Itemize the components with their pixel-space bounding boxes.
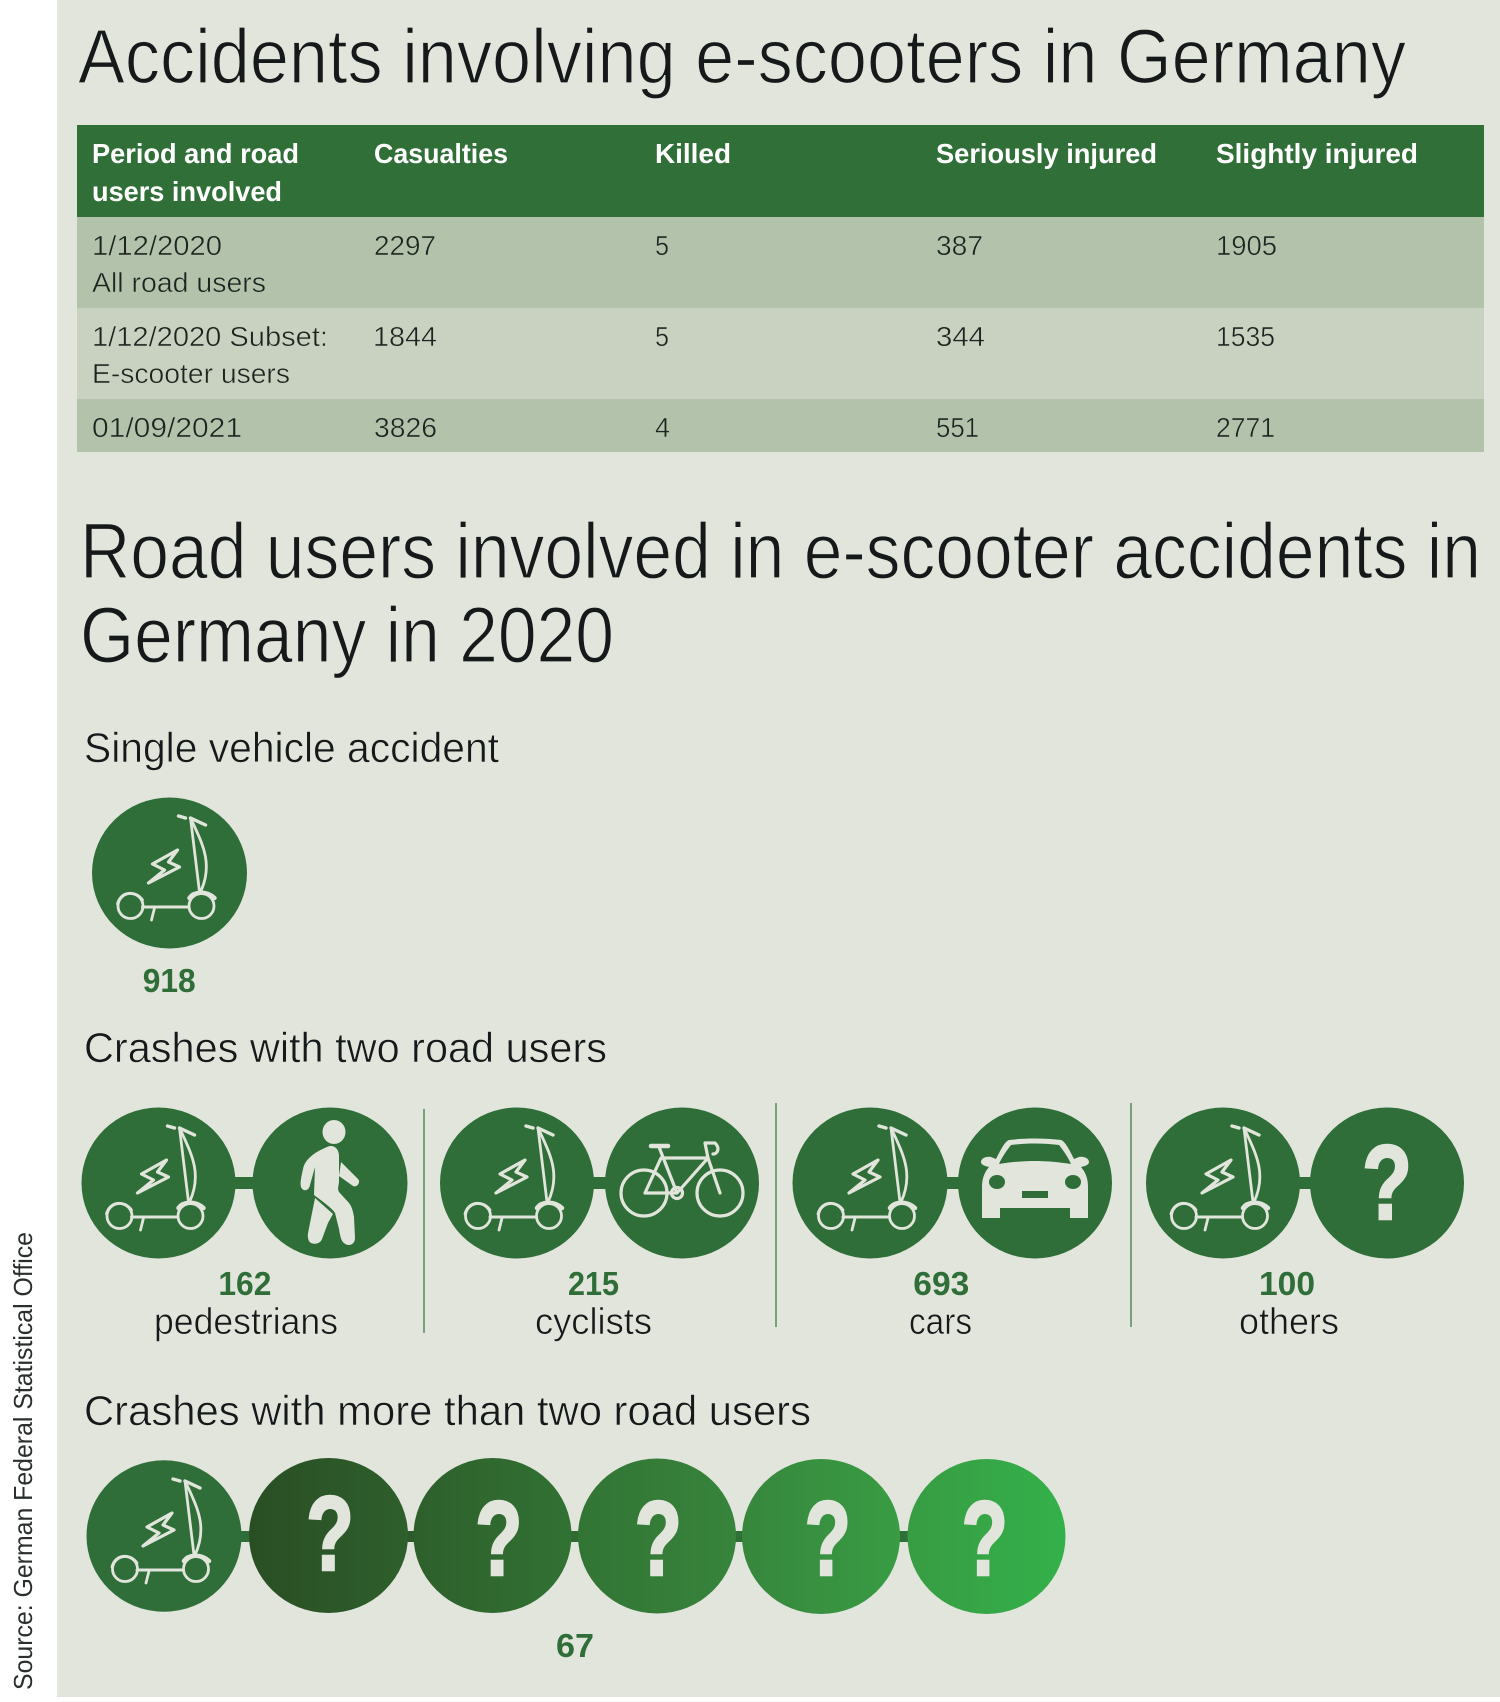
icon: scooter circle: [82, 1108, 236, 1258]
icon: question circle 1: ?: [306, 1475, 354, 1593]
icon: question circle 3: ?: [634, 1480, 682, 1598]
icon: question circle 4: [742, 1459, 900, 1614]
icon: bicycle: [605, 1108, 759, 1258]
table row: e-scooter users: 1844: [373, 321, 437, 352]
icon: question circle 1: [249, 1458, 408, 1613]
icon: pedestrian: [252, 1108, 408, 1258]
table row: all road users: All road users: [92, 267, 266, 298]
table row: e-scooter users: 1/12/2020 Subset:: [92, 321, 328, 352]
subheading: crashes with more than two road users: Crashes with more than two road users: [84, 1387, 811, 1434]
table row: all road users: 387: [936, 230, 983, 261]
label: cars: cars: [909, 1301, 972, 1342]
group: others: [1146, 1108, 1464, 1342]
table row: e-scooter users: [77, 308, 1484, 399]
icon: question circle 2: ?: [475, 1480, 522, 1598]
table row: e-scooter users: 5: [655, 321, 669, 352]
table row: 2021: 4: [655, 412, 670, 443]
table row: 2021: 551: [936, 412, 979, 443]
icon: scooter circle: [792, 1108, 948, 1258]
source note: Source: German Federal Statistical Office: [8, 1232, 38, 1690]
connector: [230, 1177, 258, 1189]
table row: e-scooter users: 344: [936, 321, 985, 352]
icon: car: [958, 1108, 1112, 1258]
table row: all road users: [77, 217, 1484, 308]
icon: question circle 5: [908, 1459, 1066, 1614]
connectors: [238, 1531, 910, 1542]
table row: all road users: 5: [655, 230, 669, 261]
label: cyclists: cyclists: [535, 1301, 652, 1342]
icon: question circle 4: ?: [804, 1480, 851, 1598]
group: pedestrians: [82, 1108, 408, 1342]
table header: users involved: [92, 176, 282, 207]
icon: scooter circle: [1146, 1108, 1300, 1258]
table header: Killed: [655, 138, 731, 169]
table: accidents: [77, 125, 1484, 452]
value: 67: 67: [556, 1627, 594, 1664]
table row: 2021: 2771: [1216, 412, 1275, 443]
heading: road users involved: Germany in 2020: [80, 590, 614, 679]
icon: scooter circle: [92, 798, 247, 948]
icon: scooter circle: [440, 1108, 594, 1258]
connector: [942, 1177, 962, 1189]
value: 100: 100: [1259, 1265, 1315, 1302]
icon: question circle 2: [414, 1458, 572, 1613]
connector: [590, 1177, 608, 1189]
value: 162: 162: [218, 1265, 271, 1302]
group: cyclists: [440, 1108, 759, 1342]
value: 215: 215: [568, 1265, 619, 1302]
table row: all road users: 2297: [374, 230, 436, 261]
table header: Casualties: [374, 138, 508, 169]
table header: [77, 125, 1484, 217]
icon: scooter circle: [86, 1460, 242, 1612]
table header: Period and road: [92, 138, 299, 169]
group: multi-user crash chain: [86, 1458, 1066, 1614]
table row: 2021: 3826: [374, 412, 437, 443]
icon: question circle 5: ?: [962, 1480, 1008, 1598]
table header: Slightly injured: [1216, 138, 1418, 169]
table row: all road users: 1905: [1216, 230, 1277, 261]
table row: all road users: 1/12/2020: [92, 230, 222, 261]
group: cars: [792, 1108, 1112, 1342]
icon: question mark circle: ?: [1362, 1124, 1412, 1242]
subheading: crashes with two road users: Crashes with two road users: [84, 1024, 607, 1071]
title: Accidents involving e-scooters in Germany: [78, 14, 1406, 100]
label: others: others: [1239, 1301, 1339, 1342]
value: 918: 918: [143, 962, 196, 999]
table row: e-scooter users: E-scooter users: [92, 358, 290, 389]
label: pedestrians: pedestrians: [154, 1301, 338, 1342]
heading: road users involved: [80, 506, 1481, 679]
table row: 2021: [77, 399, 1484, 452]
value: 693: 693: [913, 1265, 969, 1302]
connector: [1296, 1177, 1316, 1189]
table row: e-scooter users: 1535: [1216, 321, 1275, 352]
icon: question mark circle: [1310, 1108, 1464, 1258]
subheading: single vehicle accident: Single vehicle accident: [84, 724, 499, 771]
table header: Seriously injured: [936, 138, 1157, 169]
icon: question circle 3: [578, 1458, 736, 1614]
table row: 2021: 01/09/2021: [92, 412, 242, 443]
